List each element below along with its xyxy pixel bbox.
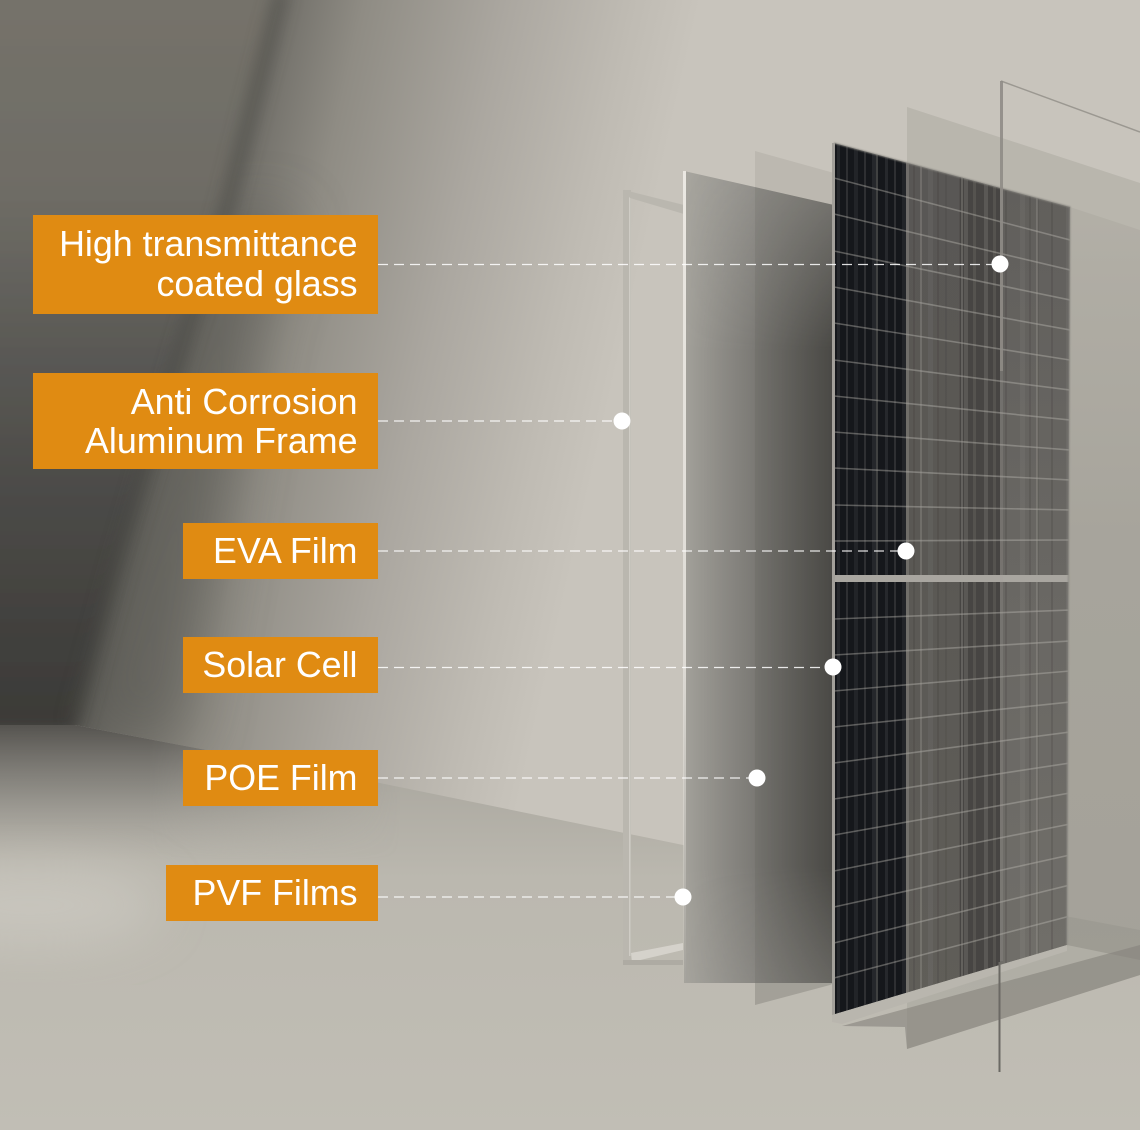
label: anti corrosion aluminum frame: Anti Corrosion [131, 382, 358, 422]
label: anti corrosion aluminum frame [33, 373, 378, 469]
label: high transmittance coated glass: High transmittance [59, 224, 358, 264]
label: POE film: POE Film [204, 758, 358, 798]
leader line: PVF films [378, 888, 692, 906]
leader line: aluminum frame [378, 412, 630, 430]
leader line: POE film [378, 770, 766, 786]
layer: POE film [755, 151, 834, 1005]
label: EVA film: EVA Film [213, 531, 358, 571]
label: POE film [183, 750, 378, 806]
darker striped cells [960, 140, 1000, 1020]
label: high transmittance coated glass [33, 215, 378, 314]
label: anti corrosion aluminum frame: Aluminum Frame [85, 421, 358, 461]
black cells [834, 140, 906, 1020]
layer: PVF film [683, 171, 834, 983]
solar panel [832, 140, 1070, 1024]
label: EVA film [183, 523, 378, 579]
label: PVF films: PVF Films [192, 873, 358, 913]
cell stripes [906, 140, 960, 1020]
cell bus lines [834, 178, 1070, 978]
label: solar cell [183, 637, 378, 693]
grey translucent cells [906, 140, 1000, 1020]
label: high transmittance coated glass: coated glass [156, 264, 358, 304]
leader line: EVA film [378, 542, 914, 560]
layer: EVA film [907, 107, 1140, 1049]
leader line: solar cell [378, 658, 842, 676]
label: solar cell: Solar Cell [202, 645, 358, 685]
panel outer frame [834, 143, 1070, 945]
layer: front high transmittance glass [998, 81, 1140, 1072]
right translucent cells [1000, 189, 1070, 965]
leader line: coated glass [378, 256, 1008, 272]
central junction bar [833, 575, 1069, 582]
vertical strings [876, 140, 1038, 1020]
label: PVF films [166, 865, 378, 921]
shadow under panel [842, 945, 1140, 1049]
layer: anti corrosion aluminum frame [623, 190, 684, 965]
